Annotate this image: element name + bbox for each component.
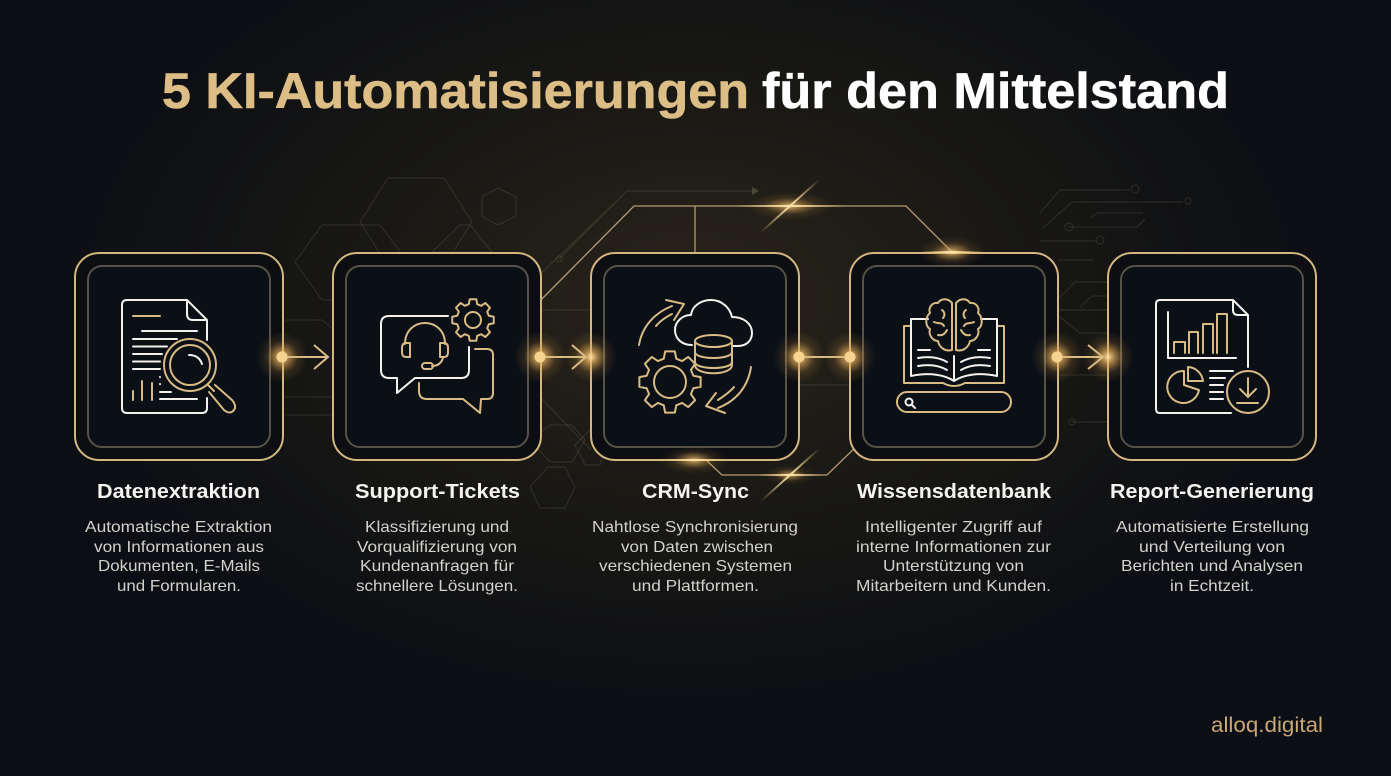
icon: book with brain and search bar bbox=[897, 299, 1011, 412]
icon: document with magnifier bbox=[122, 300, 235, 413]
text: Report-Generierung: und Verteilung von bbox=[1139, 539, 1285, 556]
panel: Wissensdatenbank card bbox=[850, 253, 1058, 460]
icon: headset chat and gear bbox=[381, 299, 494, 413]
text: Support-Tickets: Klassifizierung und bbox=[365, 519, 509, 536]
text: CRM-Sync: Nahtlose Synchronisierung bbox=[592, 519, 798, 536]
text: Wissensdatenbank: Wissensdatenbank bbox=[857, 481, 1052, 503]
text: Datenextraktion: Datenextraktion bbox=[97, 481, 260, 503]
title: 5 KI-Automatisierungen bbox=[162, 63, 749, 119]
text: CRM-Sync: von Daten zwischen bbox=[621, 539, 773, 556]
text: Wissensdatenbank: Intelligenter Zugriff auf bbox=[865, 519, 1043, 536]
text: Support-Tickets: schnellere Lösungen. bbox=[356, 578, 518, 595]
text: Wissensdatenbank bbox=[856, 481, 1052, 595]
title bbox=[162, 63, 1229, 119]
title: für den Mittelstand bbox=[762, 63, 1229, 119]
brand footer: alloq.digital bbox=[1211, 714, 1323, 737]
icon: report with charts and download bbox=[1156, 300, 1269, 413]
text: Report-Generierung bbox=[1110, 481, 1314, 595]
text: Datenextraktion: Dokumenten, E-Mails bbox=[98, 558, 260, 575]
text: Support-Tickets: Vorqualifizierung von bbox=[357, 539, 517, 556]
text: Support-Tickets bbox=[355, 481, 520, 595]
panel: CRM-Sync card bbox=[591, 253, 799, 460]
light flares bbox=[660, 178, 986, 503]
text: CRM-Sync: verschiedenen Systemen bbox=[599, 558, 792, 575]
text: Datenextraktion: Automatische Extraktion bbox=[85, 519, 272, 536]
text: Support-Tickets: Kundenanfragen für bbox=[360, 558, 515, 575]
text: CRM-Sync: und Plattformen. bbox=[632, 578, 759, 595]
arrow: Datenextraktion to Support-Tickets bbox=[256, 331, 328, 383]
connector: CRM-Sync to Wissensdatenbank bbox=[773, 331, 876, 383]
text: CRM-Sync bbox=[592, 481, 798, 595]
text: Datenextraktion: von Informationen aus bbox=[94, 539, 264, 556]
text: Report-Generierung: Report-Generierung bbox=[1110, 481, 1314, 503]
background circuit pattern bbox=[285, 178, 1191, 508]
panel: Report-Generierung card bbox=[1108, 253, 1316, 460]
text: CRM-Sync: CRM-Sync bbox=[642, 481, 749, 503]
arrow: Wissensdatenbank to Report-Generierung bbox=[1031, 331, 1134, 383]
text: Datenextraktion bbox=[85, 481, 272, 595]
text: Report-Generierung: Berichten und Analysen bbox=[1121, 558, 1303, 575]
text: Support-Tickets: Support-Tickets bbox=[355, 481, 520, 503]
panel: Datenextraktion card bbox=[75, 253, 283, 460]
panel: Support-Tickets card bbox=[333, 253, 541, 460]
icon: cloud database gear sync bbox=[639, 300, 752, 413]
text: Report-Generierung: Automatisierte Erstellung bbox=[1116, 519, 1309, 536]
arrow: Support-Tickets to CRM-Sync bbox=[514, 331, 617, 383]
text: Report-Generierung: in Echtzeit. bbox=[1170, 578, 1254, 595]
text: Wissensdatenbank: Mitarbeitern und Kunden. bbox=[856, 578, 1051, 595]
text: Wissensdatenbank: Unterstützung von bbox=[883, 558, 1024, 575]
text: Datenextraktion: und Formularen. bbox=[117, 578, 241, 595]
text: Wissensdatenbank: interne Informationen zur bbox=[856, 539, 1052, 556]
connector: gold circuit lines above and below bbox=[529, 206, 952, 475]
